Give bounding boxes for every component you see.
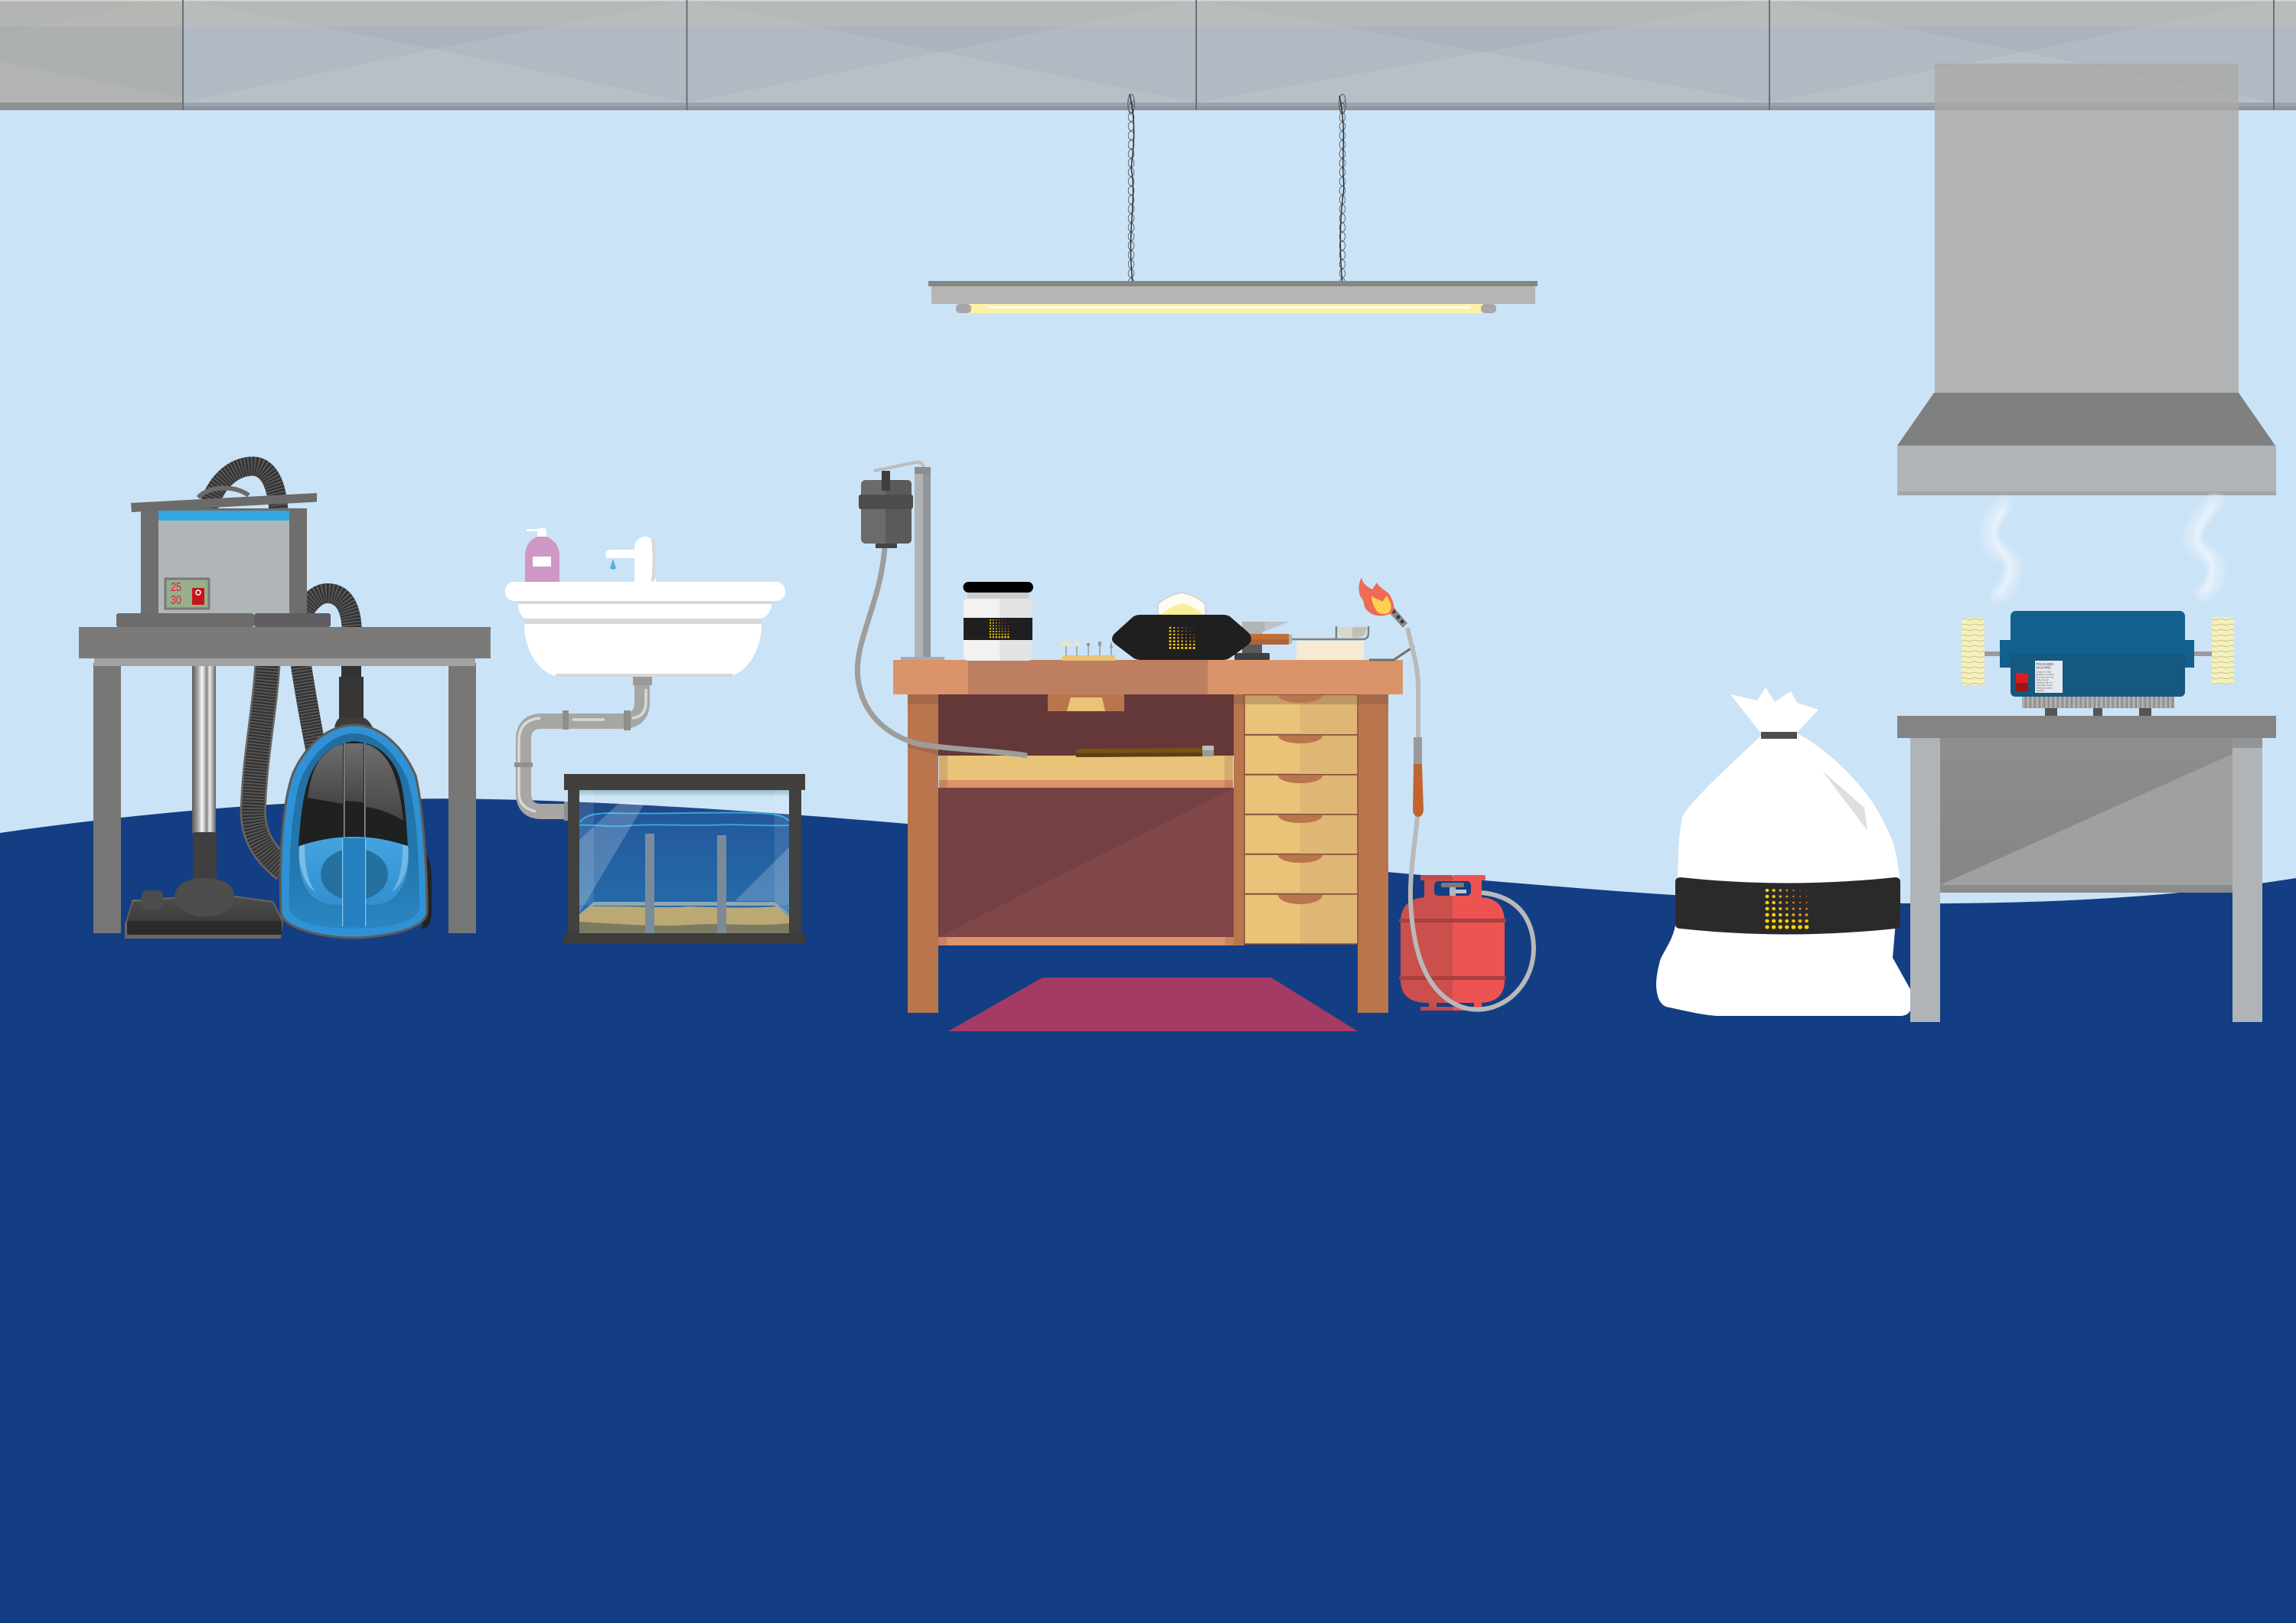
flex shaft motor bbox=[859, 471, 913, 548]
steam bbox=[1990, 502, 2216, 594]
bench legs bbox=[908, 694, 1388, 1013]
lamp chains bbox=[1127, 94, 1347, 283]
lamp housing bbox=[928, 281, 1538, 304]
red rubber mat bbox=[948, 978, 1358, 1031]
water bbox=[579, 812, 789, 934]
control panel bbox=[165, 579, 209, 609]
drawers column bbox=[1244, 695, 1358, 944]
machine label: Large or small, bbox=[2036, 671, 2052, 674]
ribbed base bbox=[2022, 697, 2174, 708]
machine label: POLISHING bbox=[2036, 662, 2053, 666]
machine label: cleaned bbox=[2036, 689, 2044, 692]
burr tool stand bbox=[1061, 642, 1115, 661]
polishing shaft bbox=[1985, 651, 2212, 656]
cleaner lid bbox=[131, 493, 317, 512]
bench top bbox=[893, 660, 1403, 694]
bottom shelf bbox=[938, 937, 1234, 945]
vacuum floor head bbox=[125, 832, 283, 939]
hanging small drawer bbox=[1048, 694, 1124, 711]
machine label: delicate or robust. bbox=[2036, 673, 2055, 676]
control panel: 25 bbox=[171, 581, 181, 594]
sink bbox=[505, 582, 785, 677]
cleaner tank bbox=[141, 508, 307, 613]
jar bbox=[963, 582, 1033, 661]
stainless table bbox=[1897, 716, 2276, 1022]
vacuum table bbox=[79, 627, 491, 933]
floor bbox=[0, 798, 2296, 1623]
flex shaft hose bbox=[857, 548, 1027, 756]
polishing machine bbox=[1962, 611, 2234, 716]
white rubbish sack bbox=[1656, 687, 1910, 1016]
gas cylinder bbox=[1399, 875, 1506, 1011]
machine label: Its motor sets the bbox=[2036, 675, 2054, 678]
control panel: 30 bbox=[171, 594, 181, 607]
tank back rim bbox=[579, 902, 789, 916]
machine label: style of your bbox=[2036, 678, 2049, 681]
bench stick tool bbox=[1076, 746, 1214, 757]
glass reflections bbox=[579, 802, 645, 913]
bench interior bbox=[938, 694, 1234, 937]
cleaner base bbox=[116, 613, 331, 627]
faucet bbox=[605, 537, 656, 582]
polishing buffs bbox=[1962, 617, 2234, 685]
machine label: MACHINE bbox=[2036, 666, 2051, 669]
soap dispenser bbox=[525, 528, 559, 582]
torch flame bbox=[1358, 577, 1394, 616]
chrome wand bbox=[192, 666, 216, 833]
workbench bbox=[893, 660, 1403, 1013]
drain pipe bbox=[514, 677, 652, 821]
black coin pouch with egg bbox=[1112, 593, 1251, 660]
machine label: important that is bbox=[2036, 684, 2053, 687]
torch and gas hose bbox=[1358, 577, 1534, 1010]
extractor hood bbox=[1897, 64, 2276, 495]
ceiling duct bbox=[0, 0, 2296, 110]
vacuum canister bbox=[299, 837, 409, 926]
anvil bbox=[1234, 622, 1289, 660]
power switch bbox=[2016, 673, 2028, 691]
motor body bbox=[2000, 611, 2194, 697]
vacuum hoses bbox=[198, 466, 352, 870]
hanging lamp bbox=[928, 94, 1538, 313]
machine label: polished silk, it's bbox=[2036, 681, 2053, 684]
vacuum cleaner body bbox=[280, 677, 432, 938]
ingot mould rod and bowl bbox=[1248, 626, 1368, 660]
ultrasonic cleaner bbox=[116, 493, 331, 627]
vacuum dark dome bbox=[298, 741, 408, 847]
machine feet bbox=[2045, 708, 2151, 716]
sack label band bbox=[1675, 877, 1900, 934]
machine label bbox=[2035, 661, 2063, 693]
fluorescent tube bbox=[956, 304, 1496, 313]
pull-out tray bbox=[939, 756, 1233, 788]
tank frame bbox=[563, 774, 805, 943]
sand bbox=[579, 906, 789, 934]
drawer shading bbox=[1245, 695, 1357, 943]
aquarium filter tank bbox=[563, 774, 805, 943]
machine label: always properly bbox=[2036, 686, 2053, 689]
flex shaft stand bbox=[874, 462, 944, 660]
